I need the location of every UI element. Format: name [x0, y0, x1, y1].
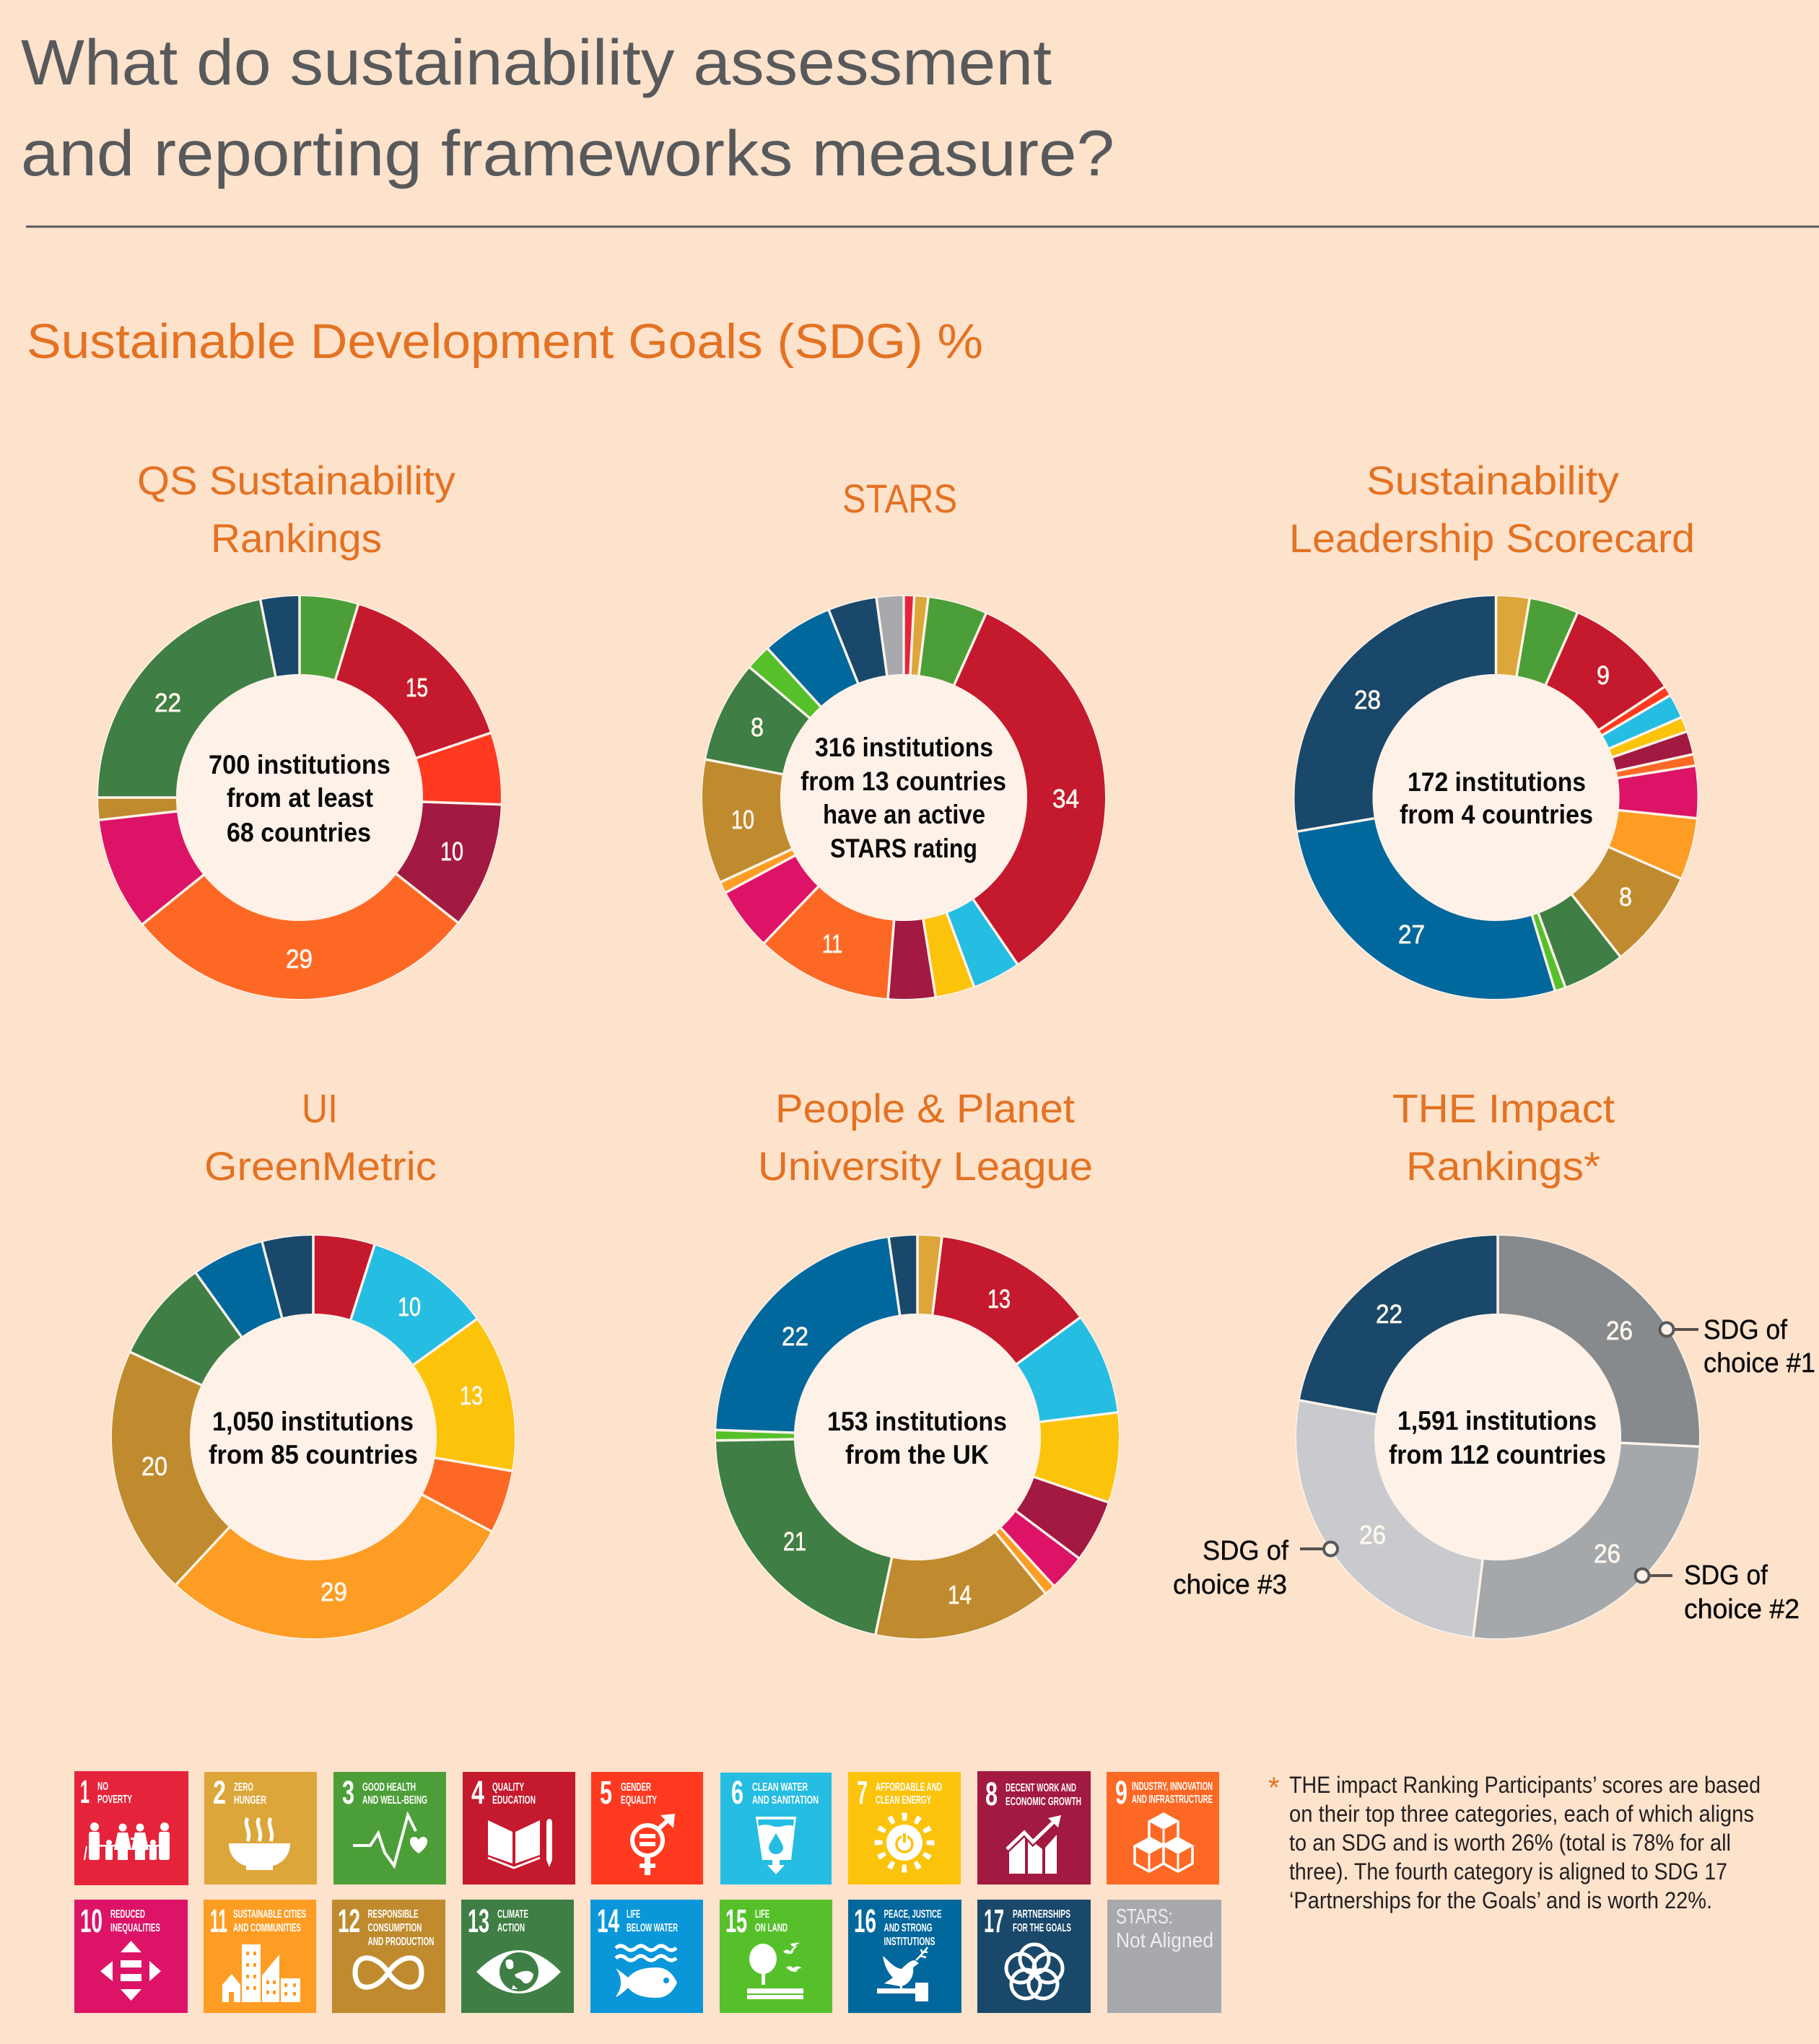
tile: SDG 4 Quality Education: 4	[471, 1774, 484, 1811]
value labels: QS	[154, 673, 463, 974]
icon: heartbeat	[353, 1815, 427, 1866]
tile: SDG 7 Clean Energy	[848, 1772, 961, 1884]
value labels: UI GreenMetric	[141, 1292, 483, 1607]
tile: SDG 7 Clean Energy: AFFORDABLE AND	[876, 1781, 942, 1794]
panel: People & Planet University League	[688, 1086, 1147, 1667]
icon: family	[84, 1822, 170, 1860]
tile: SDG 2 Zero Hunger	[204, 1772, 317, 1884]
tile: SDG 17 Partnerships	[977, 1900, 1091, 2013]
center text: STARS: from 13 countries	[801, 766, 1006, 796]
tile: SDG 3 Good Health: AND WELL-BEING	[362, 1794, 427, 1807]
value labels: Sustainability Leadership Scorecard: 28	[1354, 685, 1381, 715]
panel: QS Sustainability Rankings	[71, 458, 528, 1026]
panel heading: Sustainability Leadership Scorecard: Leadership Scorecard	[1289, 515, 1695, 561]
tile: SDG 16 Peace and Justice: 16	[854, 1903, 876, 1939]
footnote: *	[1268, 1772, 1280, 1804]
icon: five interlocking rings	[1006, 1944, 1063, 1999]
tile: SDG 10 Reduced Inequalities: 10	[80, 1903, 102, 1939]
value labels: STARS	[731, 712, 1079, 958]
tile: SDG 2 Zero Hunger: 2	[213, 1774, 226, 1811]
tile: SDG 8 Decent Work: 8	[985, 1776, 998, 1812]
center text: UI GreenMetric: 1,050 institutions	[212, 1407, 414, 1436]
tile: SDG 8 Decent Work	[977, 1771, 1091, 1884]
center text: STARS: 316 institutions	[815, 733, 993, 762]
value labels: QS: 10	[440, 837, 463, 866]
donut chart: STARS	[674, 568, 1133, 1027]
tile: SDG 16 Peace and Justice: PEACE, JUSTICE	[884, 1908, 942, 1921]
center text: STARS: have an active	[823, 800, 985, 829]
icon: bowl	[229, 1818, 290, 1870]
center text: People & Planet	[827, 1407, 1007, 1469]
value labels: THE Impact: 26	[1359, 1520, 1386, 1550]
tile: SDG 1 No Poverty: POVERTY	[97, 1794, 132, 1806]
tile: SDG 3 Good Health: GOOD HEALTH	[362, 1781, 416, 1794]
tile: SDG 15 Life on Land: ON LAND	[755, 1922, 788, 1934]
tile: SDG 7 Clean Energy: 7	[857, 1774, 868, 1811]
tile: SDG 8 Decent Work: DECENT WORK AND	[1006, 1782, 1076, 1794]
tile: SDG 6 Clean Water: CLEAN WATER	[752, 1781, 808, 1794]
value labels: STARS: 8	[751, 712, 764, 742]
icon: city buildings	[222, 1944, 300, 2002]
tile: SDG 1 No Poverty: NO	[97, 1781, 108, 1793]
callout: SDG of choice #2: SDG of	[1684, 1560, 1768, 1591]
tile: SDG 7 Clean Energy: CLEAN ENERGY	[876, 1794, 931, 1807]
tile: SDG 12 Responsible Consumption: AND PRODUCTION	[368, 1936, 435, 1948]
tile: STARS Not Aligned	[1107, 1900, 1221, 2013]
center text: STARS	[801, 733, 1006, 863]
center text: People & Planet: from the UK	[845, 1440, 989, 1469]
value labels: THE Impact: 26	[1606, 1316, 1633, 1345]
tile: SDG 4 Quality Education: QUALITY	[492, 1781, 524, 1794]
tile: SDG 1 No Poverty	[74, 1771, 188, 1885]
footnote: on their top three categories, each of which aligns	[1289, 1801, 1754, 1827]
tile: SDG 17 Partnerships: FOR THE GOALS	[1013, 1922, 1071, 1934]
icon: waves and fish	[616, 1946, 677, 1998]
icon: book and pencil	[488, 1819, 552, 1868]
tile: SDG 14 Life Below Water: LIFE	[627, 1908, 640, 1921]
icon: dove and gavel	[877, 1947, 928, 2001]
center text: Sustainability Leadership Scorecard: 172 institutions	[1408, 767, 1586, 797]
tile: SDG 9 Industry: INDUSTRY, INNOVATION	[1132, 1781, 1213, 1793]
value labels: UI GreenMetric: 13	[460, 1381, 483, 1410]
center text: THE Impact: from 112 countries	[1389, 1440, 1606, 1469]
value labels: Sustainability Leadership Scorecard: 27	[1398, 920, 1425, 949]
tile: SDG 13 Climate Action: ACTION	[497, 1922, 525, 1934]
panel heading: Sustainability Leadership Scorecard: Sustainability	[1366, 458, 1619, 503]
tile: STARS Not Aligned: STARS:	[1116, 1905, 1173, 1929]
tile: SDG 11 Sustainable Cities: SUSTAINABLE CITIES	[233, 1908, 306, 1921]
donut chart: Sustainability Leadership Scorecard	[1268, 569, 1724, 1026]
icon: tree, birds, ground	[747, 1943, 803, 1999]
panel heading: Sustainability Leadership Scorecard	[1289, 458, 1695, 561]
tile: SDG 4 Quality Education: EDUCATION	[492, 1794, 536, 1807]
footnote	[1268, 1772, 1761, 1913]
tile: SDG 6 Clean Water: AND SANITATION	[752, 1794, 819, 1807]
panel heading: STARS: STARS	[842, 476, 957, 521]
tile: SDG 2 Zero Hunger: ZERO	[234, 1781, 253, 1794]
tile: SDG 16 Peace and Justice: AND STRONG	[884, 1922, 933, 1934]
donut chart: QS	[71, 569, 528, 1026]
panel heading: People & Planet University League: University League	[758, 1143, 1093, 1189]
tile: SDG 13 Climate Action	[461, 1900, 574, 2013]
center text: STARS: STARS rating	[830, 834, 977, 863]
title: and reporting frameworks measure?	[21, 117, 1114, 189]
center text: UI GreenMetric: from 85 countries	[209, 1440, 418, 1469]
tile: SDG 15 Life on Land	[720, 1900, 832, 2013]
tile: SDG 17 Partnerships: PARTNERSHIPS	[1013, 1908, 1070, 1921]
center text: QS: from at least	[227, 783, 373, 813]
tile: SDG 3 Good Health	[333, 1772, 446, 1884]
tile: SDG 6 Clean Water: 6	[731, 1774, 743, 1811]
panel heading: People & Planet University League	[758, 1086, 1093, 1189]
icon: water glass	[756, 1817, 796, 1874]
center text: QS: 700 institutions	[209, 750, 391, 779]
tile: SDG 16 Peace and Justice	[848, 1900, 961, 2013]
panel: THE Impact Rankings	[1173, 1086, 1815, 1640]
tile: SDG 12 Responsible Consumption: 12	[338, 1903, 360, 1939]
value labels: Sustainability Leadership Scorecard: 8	[1619, 882, 1632, 912]
tile: SDG 9 Industry: 9	[1115, 1774, 1127, 1811]
tile: SDG 10 Reduced Inequalities: INEQUALITIES	[110, 1922, 160, 1934]
tile: SDG 11 Sustainable Cities: AND COMMUNITIES	[233, 1922, 301, 1934]
tile: SDG 1 No Poverty: 1	[80, 1773, 90, 1810]
panel heading: QS Sustainability Rankings: Rankings	[211, 515, 382, 561]
panel heading: THE Impact Rankings: THE Impact	[1392, 1086, 1615, 1131]
tile: SDG 3 Good Health: 3	[342, 1774, 354, 1811]
value labels: THE Impact: 26	[1594, 1539, 1620, 1568]
footnote: three). The fourth category is aligned to SDG 17	[1289, 1859, 1727, 1884]
value labels: QS: 22	[154, 688, 181, 717]
donut chart: UI GreenMetric	[84, 1207, 543, 1667]
icon: arrows and equals	[100, 1941, 161, 2001]
center text: QS	[209, 750, 391, 847]
icon: gender symbol	[632, 1814, 675, 1875]
tile: SDG 11 Sustainable Cities: 11	[210, 1903, 227, 1939]
donut chart: THE Impact	[1295, 1234, 1701, 1640]
tile: SDG 14 Life Below Water	[590, 1900, 703, 2013]
value labels: THE Impact	[1359, 1299, 1633, 1568]
donut chart: People & Planet	[688, 1207, 1147, 1667]
value labels: Sustainability Leadership Scorecard: 9	[1597, 660, 1610, 690]
tile: SDG 15 Life on Land: 15	[725, 1903, 747, 1939]
tile: SDG 9 Industry	[1107, 1772, 1219, 1884]
value labels: People & Planet: 13	[987, 1284, 1011, 1314]
tile: SDG 13 Climate Action: CLIMATE	[497, 1908, 528, 1921]
tile: SDG 10 Reduced Inequalities: REDUCED	[110, 1908, 145, 1921]
footnote: THE impact Ranking Participants’ scores are based	[1289, 1772, 1761, 1798]
panel heading: QS Sustainability Rankings: QS Sustainability	[137, 458, 455, 503]
panel heading: THE Impact Rankings: Rankings*	[1406, 1143, 1600, 1189]
panel: UI GreenMetric	[84, 1086, 543, 1667]
title	[21, 26, 1114, 189]
panel: STARS	[674, 476, 1133, 1027]
center text: UI GreenMetric	[209, 1407, 418, 1469]
value labels: THE Impact: 22	[1376, 1299, 1403, 1329]
icon: eye with globe	[476, 1950, 561, 1993]
tile: SDG 5 Gender Equality: EQUALITY	[621, 1794, 657, 1807]
value labels: STARS: 11	[822, 929, 842, 958]
tile: SDG 2 Zero Hunger: HUNGER	[234, 1794, 266, 1807]
value labels: STARS: 34	[1052, 784, 1079, 813]
value labels: STARS: 10	[731, 805, 754, 834]
tile: SDG 12 Responsible Consumption: CONSUMPTION	[368, 1922, 422, 1934]
tile: SDG 10 Reduced Inequalities	[74, 1900, 188, 2013]
panel heading: UI GreenMetric	[204, 1086, 437, 1189]
panel heading: People & Planet University League: People & Planet	[775, 1086, 1075, 1131]
tile: SDG 14 Life Below Water: 14	[597, 1903, 619, 1939]
tile: SDG 13 Climate Action: 13	[468, 1903, 489, 1939]
value labels: People & Planet	[782, 1284, 1011, 1610]
center text: THE Impact	[1389, 1406, 1606, 1469]
callout: SDG of choice #3	[1173, 1536, 1338, 1600]
callout: SDG of choice #3: choice #3	[1173, 1570, 1287, 1600]
tile: SDG 5 Gender Equality: 5	[600, 1774, 612, 1811]
tile: SDG 14 Life Below Water: BELOW WATER	[627, 1922, 678, 1934]
value labels: People & Planet: 22	[782, 1322, 808, 1351]
heading: Sustainable Development Goals: Sustainable Development Goals (SDG) %	[27, 314, 983, 369]
tile: STARS Not Aligned: Not Aligned	[1116, 1929, 1213, 1952]
tile: SDG 5 Gender Equality: GENDER	[621, 1781, 651, 1794]
tile: SDG 6 Clean Water	[720, 1773, 832, 1884]
center text: People & Planet: 153 institutions	[827, 1407, 1007, 1436]
callout: SDG of choice #3: SDG of	[1203, 1536, 1288, 1566]
tile: SDG 8 Decent Work: ECONOMIC GROWTH	[1006, 1796, 1081, 1808]
center text: Sustainability Leadership Scorecard	[1400, 767, 1593, 829]
icon: sun with power symbol	[876, 1814, 933, 1871]
tile: SDG 15 Life on Land: LIFE	[755, 1908, 769, 1921]
callout: SDG of choice #1: SDG of	[1704, 1315, 1787, 1345]
panel: Sustainability Leadership Scorecard	[1268, 458, 1724, 1026]
footnote: ‘Partnerships for the Goals’ and is worth 22%.	[1289, 1887, 1712, 1913]
callout: SDG of choice #1: choice #1	[1704, 1348, 1815, 1379]
tile: SDG 4 Quality Education	[463, 1772, 575, 1884]
value labels: UI GreenMetric: 29	[320, 1577, 347, 1607]
tile: SDG 12 Responsible Consumption	[332, 1900, 445, 2013]
center text: THE Impact: 1,591 institutions	[1397, 1406, 1597, 1436]
tile: SDG 11 Sustainable Cities	[204, 1900, 316, 2013]
panel heading: UI GreenMetric: GreenMetric	[204, 1143, 437, 1189]
tile: SDG 5 Gender Equality	[591, 1772, 703, 1884]
footnote: to an SDG and is worth 26% (total is 78% for all	[1289, 1830, 1731, 1856]
value labels: Sustainability Leadership Scorecard	[1354, 660, 1632, 949]
panel heading: QS Sustainability Rankings	[137, 458, 455, 561]
icon: cubes	[1135, 1814, 1192, 1872]
callout: SDG of choice #2	[1636, 1560, 1800, 1625]
callout: SDG of choice #2: choice #2	[1684, 1594, 1800, 1625]
value labels: People & Planet: 14	[948, 1580, 972, 1610]
tile: SDG 16 Peace and Justice: INSTITUTIONS	[884, 1936, 935, 1948]
tile: SDG 17 Partnerships: 17	[984, 1903, 1004, 1939]
value labels: UI GreenMetric: 10	[398, 1292, 421, 1322]
center text: QS: 68 countries	[227, 818, 371, 847]
value labels: QS: 29	[286, 944, 313, 974]
center text: Sustainability Leadership Scorecard: from 4 countries	[1400, 800, 1593, 829]
title: What do sustainability assessment	[21, 26, 1052, 98]
callout: SDG of choice #1	[1660, 1315, 1815, 1379]
panel heading: UI GreenMetric: UI	[302, 1086, 338, 1131]
value labels: UI GreenMetric: 20	[141, 1451, 167, 1481]
tile: SDG 9 Industry: AND INFRASTRUCTURE	[1132, 1794, 1213, 1806]
value labels: QS: 15	[406, 673, 428, 702]
value labels: People & Planet: 21	[783, 1527, 806, 1556]
tile: SDG 12 Responsible Consumption: RESPONSIBLE	[368, 1908, 419, 1921]
panel heading: THE Impact Rankings	[1392, 1086, 1615, 1189]
icon: infinity loop	[355, 1958, 422, 1987]
icon: growth chart	[1007, 1815, 1061, 1874]
legend: SDG tiles	[74, 1771, 1221, 2013]
